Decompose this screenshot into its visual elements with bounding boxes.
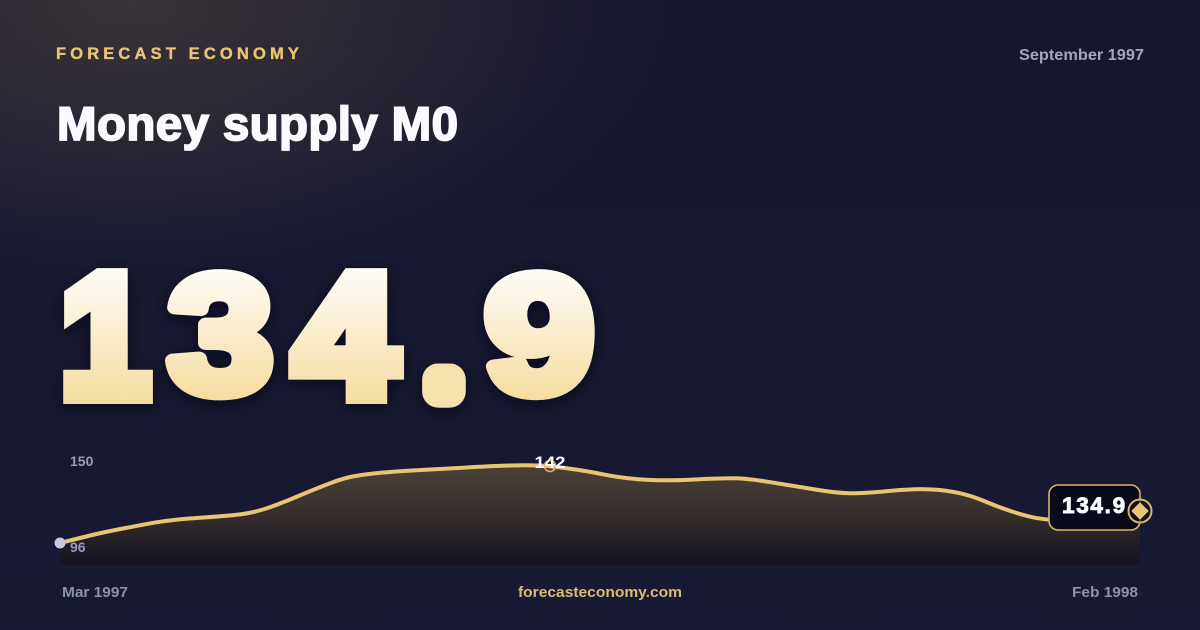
end marker (1128, 500, 1152, 522)
start date: Mar 1997 (62, 585, 128, 601)
axis label: max: 150 (70, 453, 94, 469)
source url: forecasteconomy.com (518, 585, 682, 601)
value callout: 134.9 (1062, 493, 1127, 518)
big value (61, 238, 594, 433)
big value: 4 (294, 238, 396, 433)
big value: 9 (485, 243, 594, 427)
big value: . (433, 319, 455, 408)
chart line (60, 465, 1140, 543)
peak marker (544, 460, 556, 472)
title: Money supply M0 (57, 98, 458, 151)
date: September 1997 (1019, 47, 1144, 64)
axis label: min: 96 (70, 539, 86, 555)
big value: 3 (169, 243, 273, 427)
peak label: 142 (534, 453, 566, 472)
brand label: FORECAST ECONOMY (56, 45, 303, 63)
start dot (54, 538, 66, 548)
big value: 1 (61, 240, 150, 433)
chart area (60, 465, 1140, 565)
value callout (1049, 485, 1140, 530)
line chart (54, 453, 1152, 565)
end date: Feb 1998 (1072, 585, 1138, 601)
